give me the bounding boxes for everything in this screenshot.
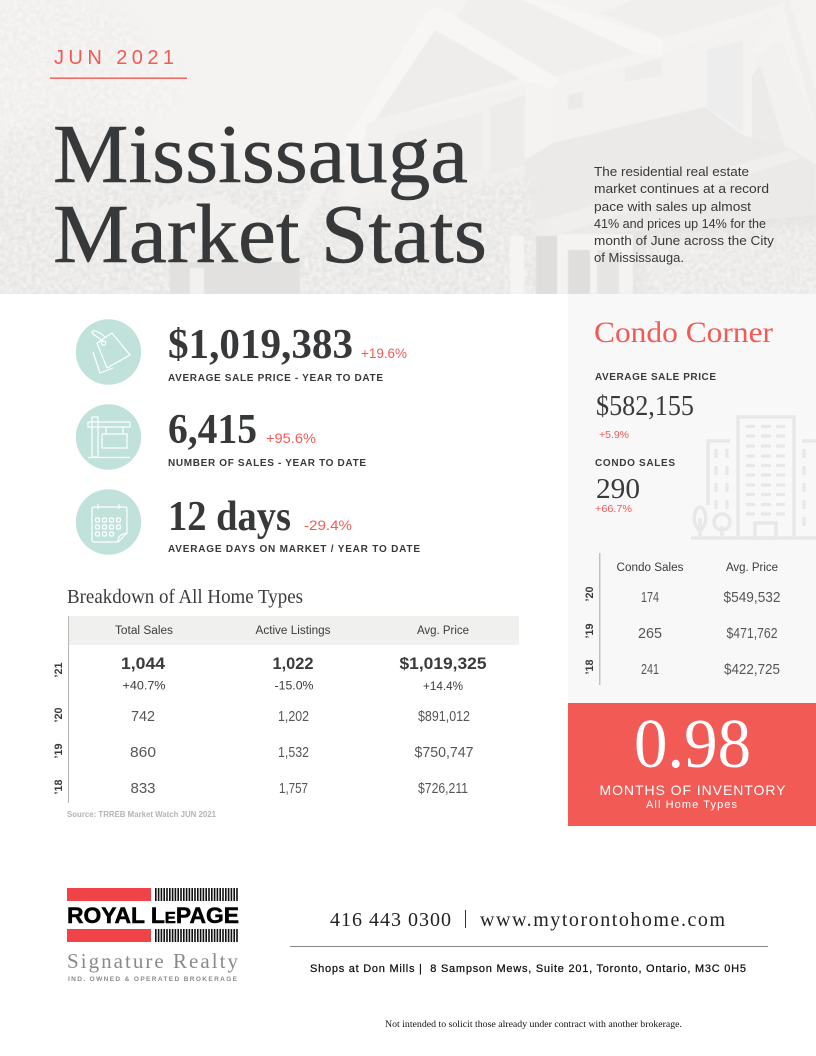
intro paragraph: The residential real estate (594, 164, 749, 179)
table: condos: 265 (638, 626, 662, 642)
table: condos: Avg. Price (726, 562, 778, 574)
heading: condo corner: Condo Corner (594, 316, 773, 349)
row 2021: $1,019,325 (400, 654, 486, 673)
intro paragraph: pace with sales up almost (594, 199, 751, 214)
trees (0, 120, 816, 294)
value: 6,415 (168, 407, 257, 453)
table header: Avg. Price (417, 625, 469, 637)
table: condos (584, 553, 780, 685)
title: Market Stats (53, 188, 487, 281)
row 2018: $726,211 (418, 781, 468, 797)
table: condos: Condo Sales (616, 562, 684, 574)
logo: Royal LePage Signature Realty: Signature Realty (67, 949, 238, 973)
year labels: ’18 (53, 780, 65, 794)
table: condos: ’20 (584, 586, 596, 602)
table: condos: ’18 (584, 660, 596, 674)
row 2018 (130, 781, 468, 797)
condo sales stat (595, 458, 675, 515)
intro paragraph (594, 164, 775, 265)
change: +95.6% (266, 430, 316, 446)
condo sales stat: 290 (596, 474, 640, 505)
change: +19.6% (361, 345, 407, 361)
title (53, 108, 487, 281)
callout: months of inventory (568, 703, 816, 826)
table: condos: 241 (641, 662, 659, 678)
row 2021: 1,044 (121, 654, 166, 673)
header background: house photo (0, 0, 816, 320)
row 2019: $750,747 (414, 745, 474, 761)
row 2021: -15.0% (274, 678, 314, 692)
row 2021: +14.4% (423, 679, 463, 693)
contact line (330, 909, 725, 931)
icon: price tags (76, 319, 141, 385)
callout: months of inventory: MONTHS OF INVENTORY (600, 782, 786, 798)
logo: Royal LePage Signature Realty (67, 888, 239, 983)
logo: Royal LePage Signature Realty: IND. OWNED & OPERATED BROKERAGE (68, 976, 238, 983)
row 2020: 1,202 (278, 709, 309, 725)
callout: months of inventory: All Home Types (646, 799, 738, 811)
date label: JUN 2021 (54, 47, 174, 69)
logo: Royal LePage Signature Realty: ROYAL LEPAGE (67, 903, 239, 928)
condo price stat (595, 372, 716, 441)
row 2021 (121, 654, 486, 693)
table header: Total Sales (115, 625, 173, 637)
table: condos: $422,725 (724, 662, 780, 678)
table header (115, 625, 469, 637)
contact line: 416 443 0300 (330, 909, 451, 931)
address: Shops at Don Mills | 8 Sampson Mews, Suite 201, Toronto, Ontario, M3C 0H5 (310, 963, 746, 975)
change: -29.4% (304, 517, 352, 533)
caption: AVERAGE SALE PRICE - YEAR TO DATE (168, 373, 383, 384)
callout: months of inventory: 0.98 (634, 706, 751, 783)
row 2020: $891,012 (418, 709, 470, 725)
condo price stat: AVERAGE SALE PRICE (595, 372, 716, 383)
caption: AVERAGE DAYS ON MARKET / YEAR TO DATE (168, 544, 420, 555)
table: condos: $549,532 (724, 590, 780, 606)
condo sales stat: CONDO SALES (595, 458, 675, 469)
year labels: ’19 (53, 744, 65, 758)
condo price stat: $582,155 (596, 391, 694, 422)
icon: for sale sign (76, 404, 141, 470)
row 2019 (130, 745, 474, 761)
condo sales stat: +66.7% (595, 503, 632, 515)
value: $1,019,383 (168, 322, 353, 368)
stat: days on market (76, 489, 420, 555)
condo price stat: +5.9% (599, 429, 629, 441)
table: condos: 174 (641, 590, 659, 606)
year labels: ’21 (53, 662, 65, 678)
row 2019: 1,532 (278, 745, 309, 761)
value: 12 days (168, 494, 291, 540)
row 2018: 833 (130, 781, 156, 797)
stat: number of sales (76, 404, 366, 470)
table: all home types (53, 616, 519, 803)
row 2021: +40.7% (122, 678, 166, 692)
date label (50, 47, 187, 79)
table: condos: ’19 (584, 624, 596, 638)
divider (290, 946, 768, 947)
table header: Active Listings (256, 625, 331, 637)
source note: Source: TRREB Market Watch JUN 2021 (67, 810, 217, 819)
heading: breakdown of all home types: Breakdown of All Home Types (67, 586, 303, 608)
disclaimer: Not intended to solicit those already under contract with another brokerage. (385, 1020, 682, 1030)
stat: average sale price (76, 319, 407, 385)
table: condos: $471,762 (726, 626, 778, 642)
row 2020 (131, 709, 470, 725)
intro paragraph: of Mississauga. (594, 250, 684, 265)
icon: calendar (76, 489, 141, 555)
row 2021: 1,022 (272, 654, 314, 673)
year labels (53, 662, 65, 794)
year labels: ’20 (53, 708, 65, 722)
panel: condo corner (568, 294, 816, 703)
row 2018: 1,757 (279, 781, 308, 797)
intro paragraph: market continues at a record (594, 181, 769, 196)
row 2019: 860 (130, 745, 156, 761)
icon: condo buildings (691, 417, 816, 538)
intro paragraph: month of June across the City (594, 233, 775, 248)
contact line: www.mytorontohome.com (480, 909, 725, 931)
caption: NUMBER OF SALES - YEAR TO DATE (168, 458, 366, 469)
title: Mississauga (53, 108, 468, 201)
row 2020: 742 (131, 709, 155, 725)
intro paragraph: 41% and prices up 14% for the (594, 216, 766, 231)
